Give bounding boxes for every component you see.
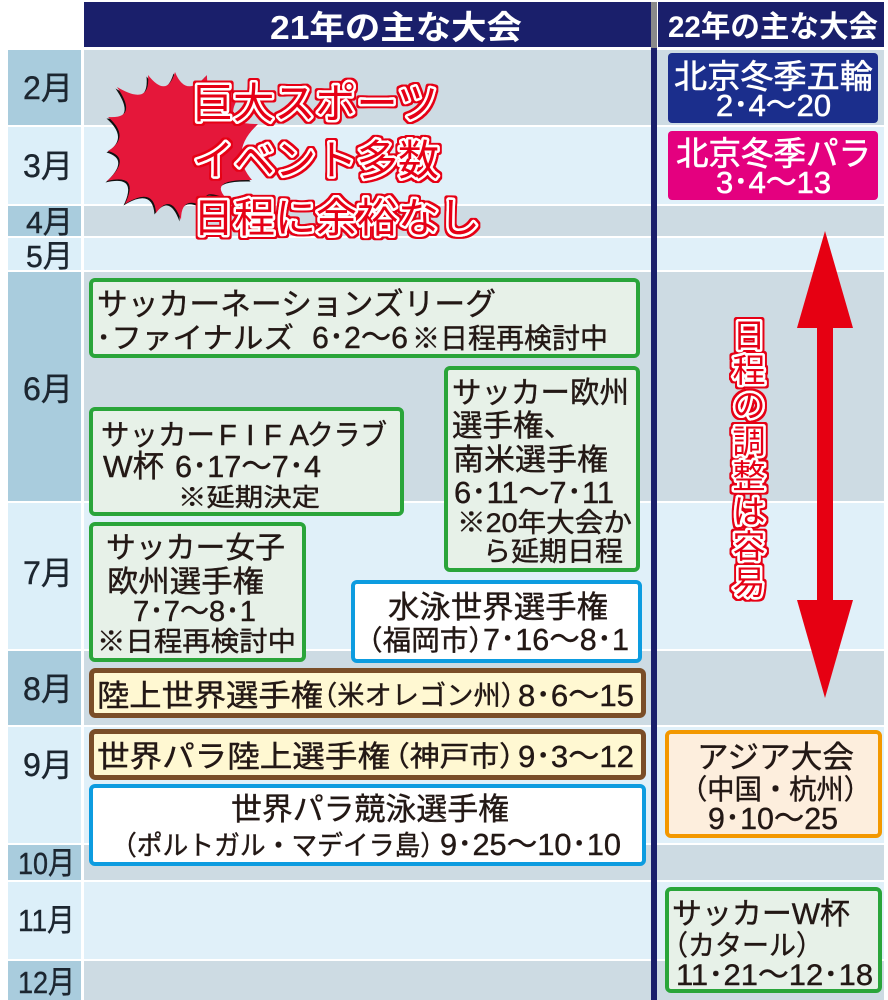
event: 北京冬季パラ: 北京冬季パラ <box>676 135 871 172</box>
event: サッカー欧州選手権、南米選手権: 6･11〜7･11 <box>454 475 614 510</box>
event: サッカーネーションズリーグ・ファイナルズ: 6･2〜6 <box>312 320 408 355</box>
event: サッカーFIFAクラブW杯: 6･17〜7･4 <box>175 449 321 484</box>
month labels column: 7月 <box>23 555 73 591</box>
event: サッカーW杯: サッカーW杯 <box>672 898 850 931</box>
event: サッカーFIFAクラブW杯: クラブ <box>307 419 387 452</box>
header: 22年の主な大会 <box>658 2 884 47</box>
event: サッカー欧州選手権、南米選手権: ら延期日程 <box>483 537 623 567</box>
event: サッカーW杯: 11･21〜12･18 <box>676 959 873 992</box>
event: サッカー欧州選手権、南米選手権: 選手権、 <box>452 410 574 443</box>
month labels column: 12月 <box>18 965 75 1000</box>
event: サッカー欧州選手権、南米選手権 <box>446 368 638 570</box>
event: サッカーFIFAクラブW杯: ※延期決定 <box>178 484 320 512</box>
header: 21年の主な大会: 21年の主な大会 <box>270 9 522 46</box>
event: 世界パラ陸上選手権 <box>92 732 644 778</box>
event: サッカーFIFAクラブW杯 <box>91 409 402 514</box>
event: サッカーFIFAクラブW杯: FIFA <box>219 420 310 452</box>
event: 世界パラ競泳選手権: 世界パラ競泳選手権 <box>231 792 509 827</box>
event: サッカー女子欧州選手権: ※日程再検討中 <box>97 627 296 657</box>
month labels column: 11月 <box>18 903 75 938</box>
month labels column: 3月 <box>23 148 73 184</box>
callout: 日程の調整は容易: 日程の調整は容易 <box>732 317 766 601</box>
icon: red starburst <box>106 72 258 222</box>
callout: 巨大スポーツイベント多数 日程に余裕なし: 日程に余裕なし <box>193 195 480 241</box>
month labels column: 4月 <box>26 205 73 240</box>
month labels column: 9月 <box>23 747 73 783</box>
event: 北京冬季五輪 <box>668 53 878 123</box>
arrow: red double-headed vertical <box>797 231 853 698</box>
event: サッカー欧州選手権、南米選手権: ※20年大会か <box>457 508 632 538</box>
event: 水泳世界選手権: （福岡市） <box>354 625 497 656</box>
month labels column: 8月 <box>23 671 73 707</box>
event: 世界パラ競泳選手権: （ポルトガル・マデイラ島） <box>111 831 446 861</box>
header: 22年の主な大会: 22年の主な大会 <box>668 11 878 44</box>
event: サッカー女子欧州選手権: サッカー女子 <box>106 532 285 565</box>
event: 世界パラ陸上選手権: 9･3〜12 <box>518 739 634 774</box>
event: サッカーネーションズリーグ・ファイナルズ <box>91 280 638 356</box>
event: 水泳世界選手権: 水泳世界選手権 <box>388 590 608 625</box>
month labels column: 5月 <box>26 239 73 274</box>
event: サッカー女子欧州選手権: 7･7〜8･1 <box>133 596 256 628</box>
event: 陸上世界選手権: 陸上世界選手権 <box>97 680 323 713</box>
event: アジア大会: （中国・杭州） <box>680 774 871 805</box>
year divider line <box>651 2 657 1000</box>
event: アジア大会: 9･10〜25 <box>708 801 838 836</box>
event: サッカー女子欧州選手権 <box>91 524 304 660</box>
event: 世界パラ競泳選手権: 9･25〜10･10 <box>440 827 621 862</box>
event: サッカーW杯 <box>661 889 880 992</box>
event: 水泳世界選手権 <box>353 582 640 661</box>
event: サッカーFIFAクラブW杯: サッカー <box>101 420 215 452</box>
event: 北京冬季五輪: 2･4〜20 <box>716 88 831 123</box>
event: 陸上世界選手権 <box>92 670 644 716</box>
event: 世界パラ陸上選手権: 世界パラ陸上選手権 <box>97 741 390 774</box>
event: 世界パラ陸上選手権: （神戸市） <box>380 741 529 772</box>
event: サッカーネーションズリーグ・ファイナルズ: サッカーネーションズリーグ <box>97 287 496 322</box>
event: アジア大会: アジア大会 <box>697 740 854 775</box>
month labels column <box>8 50 81 1000</box>
event: 陸上世界選手権: （米オレゴン州） <box>310 681 528 711</box>
event: サッカーFIFAクラブW杯: W杯 <box>103 449 164 484</box>
event: 世界パラ競泳選手権 <box>91 786 644 864</box>
callout: 巨大スポーツイベント多数 日程に余裕なし: イベント多数 <box>193 137 439 184</box>
event: サッカー欧州選手権、南米選手権: 南米選手権 <box>453 444 608 477</box>
callout: 巨大スポーツイベント多数 日程に余裕なし <box>192 80 480 241</box>
event: サッカーネーションズリーグ・ファイナルズ: ･ファイナルズ <box>96 322 294 355</box>
header: 21年の主な大会 <box>84 2 651 47</box>
event: サッカーW杯: （カタール） <box>661 930 823 961</box>
event: 北京冬季パラ: 3･4〜13 <box>716 165 831 200</box>
event: 水泳世界選手権: 7･16〜8･1 <box>483 622 629 657</box>
month labels column: 2月 <box>23 70 73 106</box>
callout: 巨大スポーツイベント多数 日程に余裕なし: 巨大スポーツ <box>192 80 438 127</box>
month labels column: 6月 <box>23 371 73 407</box>
event: 陸上世界選手権: 8･6〜15 <box>518 678 634 713</box>
event: アジア大会 <box>667 732 880 836</box>
event: サッカー欧州選手権、南米選手権: サッカー欧州 <box>452 377 629 410</box>
event: サッカーネーションズリーグ・ファイナルズ: ※日程再検討中 <box>412 323 608 354</box>
month labels column: 10月 <box>18 846 75 881</box>
event: サッカー女子欧州選手権: 欧州選手権 <box>107 566 264 599</box>
event: 北京冬季パラ <box>668 131 878 200</box>
event: 北京冬季五輪: 北京冬季五輪 <box>674 58 873 95</box>
